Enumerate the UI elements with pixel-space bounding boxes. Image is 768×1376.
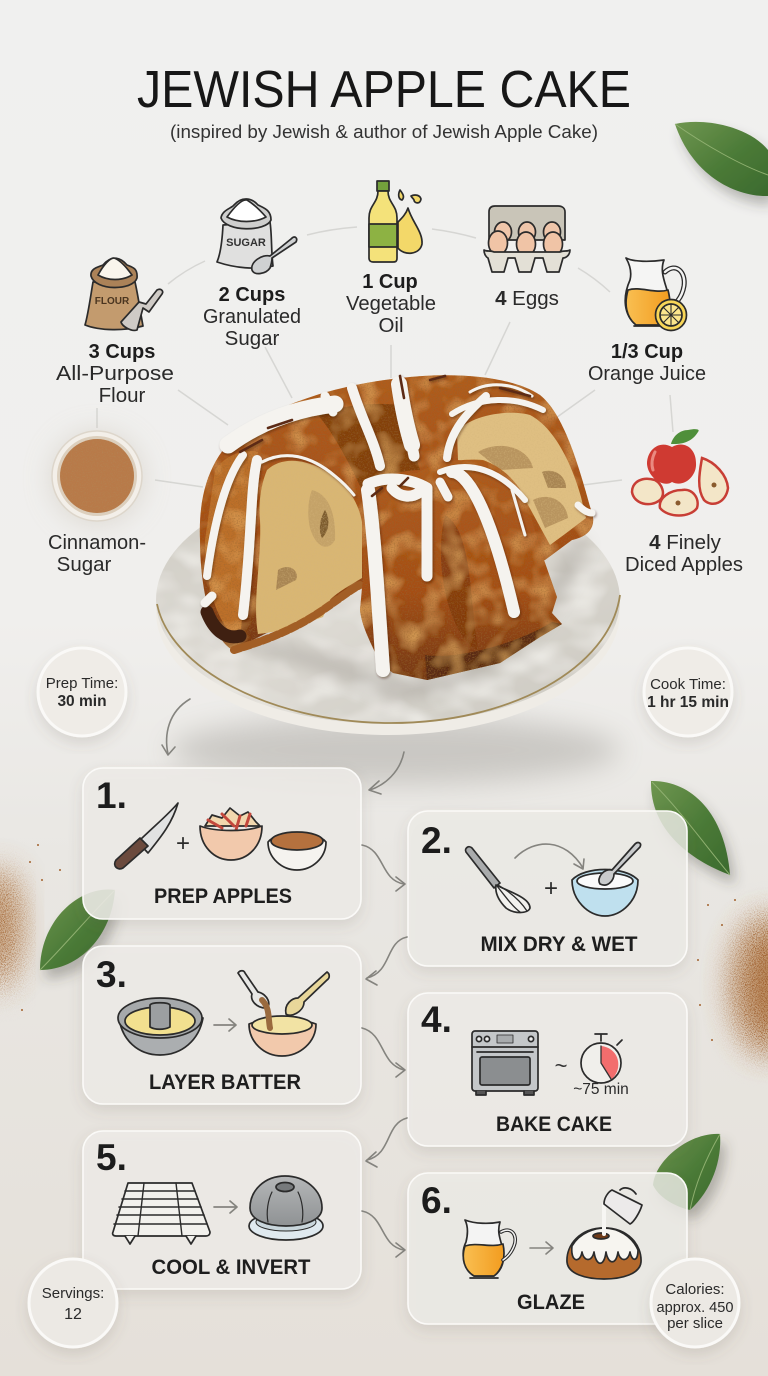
timer caption: ~75 min [573,1081,629,1098]
panel: step 2 mix dry and wet [408,811,687,966]
tilde: ~ [555,1053,567,1078]
step number 2: 2. [421,820,452,861]
cinnamon powder scatter left [0,844,61,1011]
ingredient: apples [625,429,743,576]
time badge: prep [38,648,126,736]
step label: COOL & INVERT [152,1255,310,1279]
info badge: calories: per slice [667,1315,723,1332]
icon: flour sack [85,258,163,330]
ingredient label: oil: 1 Cup [362,271,418,293]
ingredient label: cinnamon: Sugar [57,553,112,576]
time badge: cook [644,648,732,736]
ingredient label: flour [56,341,174,407]
ingredient label: cinnamon [48,531,146,576]
ingredient label: apples: Diced Apples [625,553,743,576]
ingredient label: cinnamon: Cinnamon- [48,531,146,554]
icon: knife, apples and cinnamon: + [176,830,190,857]
panel: step 1 prep apples [83,768,361,919]
icon: glazed cake and pouring cup [567,1188,642,1279]
info badge: servings [29,1259,117,1347]
ingredient label: oil: Vegetable [346,292,436,315]
icon: whisk and bowl: + [544,875,558,902]
ingredient: sugar: SUGAR [226,237,266,249]
left crust crumbs [234,585,360,650]
front slice [360,460,562,680]
ingredient label: juice: 1/3 Cup [611,341,683,363]
icon: oil bottle [369,181,422,262]
step label: LAYER BATTER [149,1070,301,1094]
leaf: left behind step cards [40,890,115,970]
ingredient: orange juice [588,258,706,385]
icon: cooling rack, inverted pan [113,1176,323,1244]
ingredient connector lines [97,227,673,487]
leaf: behind step 6 [653,1134,720,1210]
right cut face [457,413,586,545]
arrow: step 5 to step 6 [362,1211,405,1257]
bundt cake with cut slice [200,375,593,680]
ingredient: cinnamon sugar [48,431,146,576]
left cut face [256,461,362,634]
step number 3: 3. [96,954,127,995]
info badge: servings: Servings: [42,1285,104,1302]
icon: juice jug [625,258,686,330]
time badge: cook: 1 hr 15 min [647,694,729,711]
step label: PREP APPLES [154,884,292,908]
ingredient label: juice [588,341,706,385]
plate [156,476,620,735]
icon: bundt pan, batter and spoons [118,971,329,1056]
panel: step 3 layer batter [83,946,361,1104]
ingredient label: eggs: 4 Eggs [495,287,559,310]
icon: egg carton [484,206,570,272]
plate shadow [170,716,620,784]
ingredient label: sugar: 2 Cups [219,284,285,306]
info badge: calories: Calories: [665,1281,725,1298]
icon: cinnamon dish [52,431,142,523]
panel: step 6 glaze [408,1173,687,1324]
ingredient label: flour: All-Purpose [56,362,174,385]
arrow: step 3 to step 4 [362,1028,405,1077]
icon: jug [463,1220,515,1278]
ingredient: flour: FLOUR [95,296,130,307]
arrow: prep time to step 1 [162,699,190,755]
ingredient label: apples [625,531,743,576]
ingredient label: oil [346,271,436,337]
icon: oven [472,1031,538,1095]
step label: BAKE CAKE [496,1112,612,1136]
cinnamon powder scatter right [697,899,768,1057]
ingredient: eggs [484,206,570,310]
step label: GLAZE [517,1290,585,1314]
time badge: cook: Cook Time: [650,676,726,693]
ingredient label: sugar: Sugar [225,327,280,350]
subtitle: (inspired by Jewish & author of Jewish Apple Cake) [170,122,598,142]
ingredient: oil [346,181,436,337]
arrow: step 4 to step 5 [366,1118,407,1167]
arrow: step 1 to step 2 [362,845,405,891]
ingredient label: juice: Orange Juice [588,362,706,385]
ingredient label: sugar [203,284,301,350]
ingredient: flour [56,258,174,407]
ingredient label: oil: Oil [378,314,404,337]
time badge: prep: 30 min [57,693,107,710]
info badge: calories [651,1259,739,1347]
panel: step 5 cool and invert [83,1131,361,1289]
ingredient: sugar [203,199,301,350]
icon: sugar sack [217,199,297,274]
step label: MIX DRY & WET [480,932,638,956]
arrow inside step 6 [530,1242,553,1254]
icon: apples [632,429,728,516]
step number 5: 5. [96,1137,127,1178]
title: JEWISH APPLE CAKE [137,61,631,119]
icon: whisk and bowl [466,843,641,916]
leaf: top right [675,122,768,196]
glaze drips [205,376,592,670]
ingredient label: sugar: Granulated [203,305,301,328]
leaf: behind step 2 [651,781,730,875]
step number 4: 4. [421,999,452,1040]
info badge: servings: 12 [64,1306,82,1323]
icon: knife, apples and cinnamon [115,803,326,870]
info badge: calories: approx. 450 [656,1299,734,1316]
ingredient label: flour: Flour [99,384,146,407]
arrow: plate to step 1 [369,752,404,794]
icon: timer [581,1034,622,1083]
ingredient label: flour: 3 Cups [89,341,155,363]
panel: step 4 bake cake [408,993,687,1146]
dark base patch [207,612,240,637]
time badge: prep: Prep Time: [46,675,118,692]
arrow: step 2 to step 3 [366,937,407,985]
step number 6: 6. [421,1180,452,1221]
ingredient label: apples: 4 Finely [649,531,722,554]
step number 1: 1. [96,775,127,816]
cake back ring [200,375,593,650]
